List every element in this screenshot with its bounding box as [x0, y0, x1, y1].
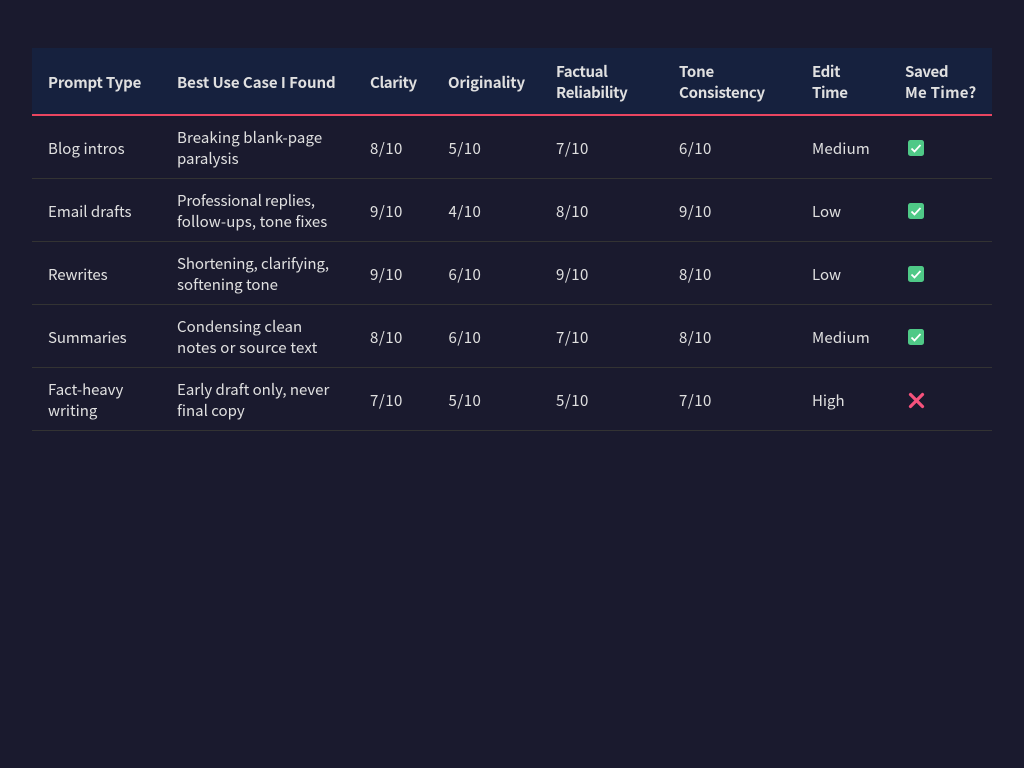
row: Fact-heavy writing: Fact-heavy — [48, 379, 123, 400]
row: Fact-heavy writing: 5/10 — [448, 390, 481, 411]
icon: check mark — [908, 329, 924, 345]
column heading: Factual Reliability: Reliability — [556, 82, 627, 103]
row: Email drafts: 4/10 — [448, 201, 481, 222]
row: Blog intros: 7/10 — [556, 138, 589, 159]
row: Rewrites: 9/10 — [370, 264, 403, 285]
row: Rewrites: Low — [812, 264, 841, 285]
row: Summaries: 6/10 — [448, 327, 481, 348]
row: Summaries: 8/10 — [370, 327, 403, 348]
column heading: Saved Me Time — [905, 61, 976, 103]
row: Email drafts: Low — [812, 201, 841, 222]
row: Fact-heavy writing: writing — [48, 400, 97, 421]
icon: check mark — [908, 266, 924, 282]
row: Summaries: Condensing clean — [177, 316, 302, 337]
column heading: Factual Reliability: Factual — [556, 61, 607, 82]
row: Summaries: Medium — [812, 327, 870, 348]
row: Fact-heavy writing — [32, 368, 992, 431]
row: Email drafts: 8/10 — [556, 201, 589, 222]
row: Rewrites: 6/10 — [448, 264, 481, 285]
column heading: Edit Time: Time — [812, 82, 848, 103]
row: Blog intros: Medium — [812, 138, 870, 159]
icon: cross mark — [908, 392, 924, 408]
row: Blog intros: 5/10 — [448, 138, 481, 159]
column heading: Factual Reliability — [556, 61, 628, 103]
row: Email drafts: 9/10 — [679, 201, 712, 222]
row: Blog intros: 8/10 — [370, 138, 403, 159]
column heading: Saved Me Time: Saved — [905, 61, 948, 82]
row: Summaries — [32, 305, 992, 368]
icon: check mark — [908, 140, 924, 156]
row: Fact-heavy writing: Early draft only, never — [177, 379, 329, 400]
column heading: Edit Time — [812, 61, 848, 103]
row: Blog intros: 6/10 — [679, 138, 712, 159]
column heading: Tone Consistency: Tone — [679, 61, 714, 82]
row: Summaries: 8/10 — [679, 327, 712, 348]
row: Fact-heavy writing: final copy — [177, 400, 245, 421]
table header — [32, 48, 992, 116]
column heading: Tone Consistency — [679, 61, 765, 103]
row: Blog intros: Blog intros — [48, 138, 125, 159]
column heading: Edit Time: Edit — [812, 61, 840, 82]
row: Rewrites — [32, 242, 992, 305]
row: Summaries: Summaries — [48, 327, 127, 348]
row: Rewrites: Shortening, clarifying, — [177, 253, 329, 274]
column heading: Clarity: Clarity — [370, 72, 417, 93]
row: Summaries: 7/10 — [556, 327, 589, 348]
row: Fact-heavy writing: 7/10 — [679, 390, 712, 411]
column heading: Prompt Type: Prompt Type — [48, 72, 141, 93]
row: Rewrites: Rewrites — [48, 264, 108, 285]
row: Fact-heavy writing: High — [812, 390, 845, 411]
row: Fact-heavy writing: 5/10 — [556, 390, 589, 411]
row: Email drafts: 9/10 — [370, 201, 403, 222]
row: Blog intros — [32, 116, 992, 179]
icon: check mark — [908, 203, 924, 219]
row: Email drafts — [32, 179, 992, 242]
row: Email drafts: Email drafts — [48, 201, 131, 222]
row: Rewrites: softening tone — [177, 274, 278, 295]
row: Summaries: notes or source text — [177, 337, 318, 358]
row: Email drafts: Professional replies, — [177, 190, 315, 211]
row: Blog intros: Breaking blank-page — [177, 127, 322, 148]
column heading: Tone Consistency: Consistency — [679, 82, 765, 103]
row: Fact-heavy writing: 7/10 — [370, 390, 403, 411]
table — [32, 48, 992, 431]
row: Rewrites: 8/10 — [679, 264, 712, 285]
row: Email drafts: follow-ups, tone fixes — [177, 211, 327, 232]
row: Blog intros: paralysis — [177, 148, 239, 169]
column heading: Best Use Case: Best Use Case I Found — [177, 72, 336, 93]
row: Rewrites: 9/10 — [556, 264, 589, 285]
column heading: Originality: Originality — [448, 72, 525, 93]
column heading: Saved Me Time: Me Time? — [905, 82, 976, 103]
